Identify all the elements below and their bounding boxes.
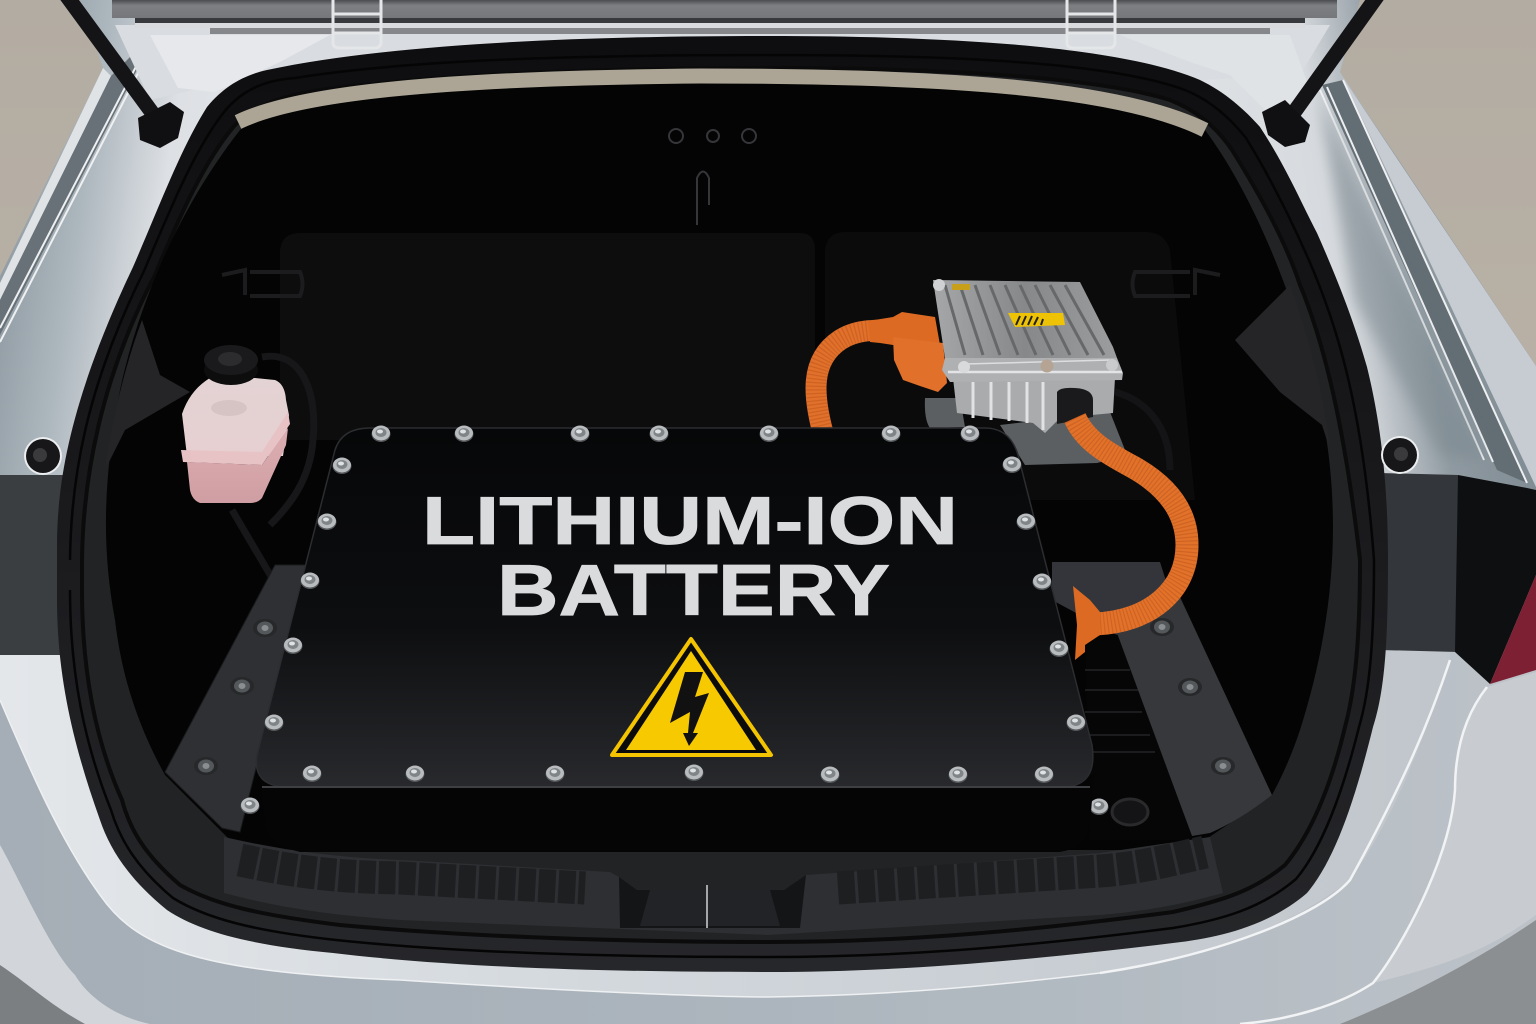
tailgate underside (112, 0, 1337, 115)
console knobs and hook (669, 129, 756, 225)
strut boot right (1262, 100, 1310, 147)
floor rail right upper (1052, 562, 1172, 635)
rear seat back left (280, 233, 815, 440)
inner trim (82, 68, 1360, 942)
orange cable right (1075, 418, 1187, 624)
tail light (1490, 575, 1536, 684)
coolant hose (232, 356, 314, 600)
side trim bulge left (105, 320, 190, 470)
strut left (66, 0, 156, 118)
left orange connector (868, 312, 947, 392)
chrome latch left (333, 0, 381, 48)
car body: lower bumper (0, 650, 1536, 1024)
coolant bottle (181, 345, 290, 503)
orange connector right (1073, 586, 1100, 660)
fastener right (1381, 436, 1419, 474)
trunk interior (106, 75, 1333, 850)
inverter bracket (925, 398, 1127, 465)
car body: left pillar (0, 0, 300, 500)
rear seat back right (825, 232, 1195, 500)
strut boot left (138, 102, 184, 148)
left orange cable (816, 330, 893, 440)
dark tail panel (1455, 475, 1536, 684)
fastener left (24, 437, 62, 475)
floor rail right (1117, 597, 1272, 836)
side trim bulge right (1235, 285, 1330, 450)
left black trim panel (0, 475, 70, 655)
small black conduit (1115, 392, 1170, 470)
rubber door seal (57, 36, 1388, 972)
floor rail left (165, 565, 315, 832)
headliner strip (238, 76, 1205, 130)
rear sill with ribs (224, 837, 1223, 935)
battery label text: BATTERY (497, 551, 890, 631)
battery label text (422, 483, 958, 631)
right black trim panel (1380, 473, 1458, 652)
power inverter box (933, 279, 1123, 433)
rail bolts (194, 618, 1235, 815)
battery label text: LITHIUM-ION (422, 483, 958, 559)
right floor grille under battery (1085, 640, 1192, 840)
seat latch right (1132, 270, 1220, 296)
strut right (1290, 0, 1378, 118)
seat latch left (222, 270, 302, 296)
car body: right pillar (1200, 0, 1536, 500)
seal groove line (70, 55, 1374, 957)
battery pack (256, 426, 1094, 852)
high voltage warning triangle (612, 639, 771, 755)
lid bolts (264, 426, 1086, 783)
chrome latch right (1067, 0, 1115, 48)
